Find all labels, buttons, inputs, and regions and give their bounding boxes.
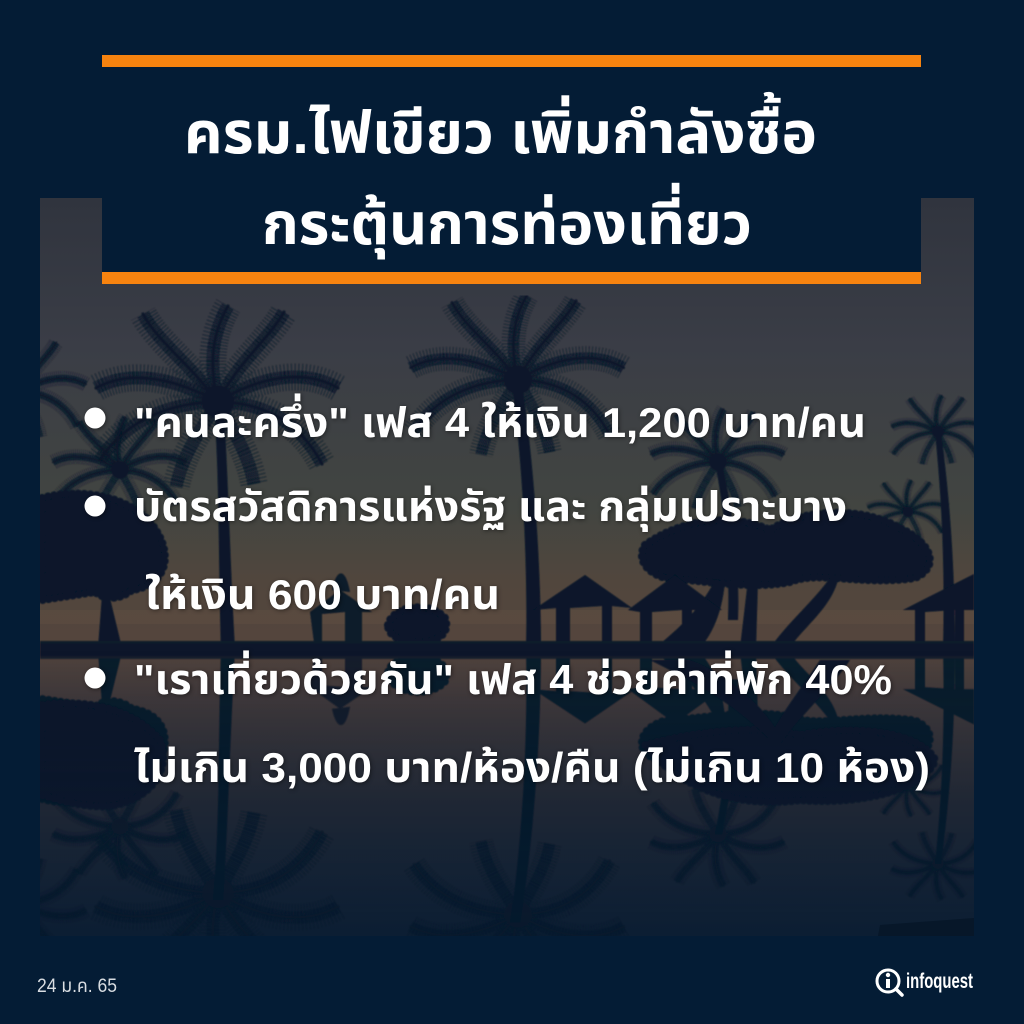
bullet 3 text line 2: ไม่เกิน 3,000 บาท/ห้อง/คืน (ไม่เกิน 10 ห้อง) — [134, 744, 930, 791]
date: 24 ม.ค. 65 — [37, 976, 117, 997]
bullet 1 dot — [84, 408, 106, 428]
bullet 3 dot — [84, 668, 106, 688]
bullet 1 text: "คนละครึ่ง" เฟส 4 ให้เงิน 1,200 บาท/คน — [134, 393, 866, 446]
bullet 3 text line 1: "เราเที่ยวด้วยกัน" เฟส 4 ช่วยค่าที่พัก 40% — [134, 650, 892, 703]
bullet 2 text line 2: ให้เงิน 600 บาท/คน — [145, 571, 500, 618]
panel: title box — [102, 55, 921, 284]
text block: bullet list — [84, 393, 930, 791]
icon: magnifier with i — [877, 970, 902, 995]
title line 1: ครม.ไฟเขียว เพิ่มกำลังซื้อ — [184, 91, 817, 166]
panel: sunset palm photo — [0, 198, 984, 997]
logo: infoquest — [877, 970, 973, 995]
orange top bar — [102, 55, 921, 67]
wordmark: infoquest — [906, 970, 973, 993]
bullet 2 dot — [84, 496, 106, 516]
bullet 2 text line 1: บัตรสวัสดิการแห่งรัฐ และ กลุ่มเปราะบาง — [134, 483, 847, 532]
title line 2: กระตุ้นการท่องเที่ยว — [262, 182, 752, 259]
orange bottom bar — [102, 272, 921, 284]
